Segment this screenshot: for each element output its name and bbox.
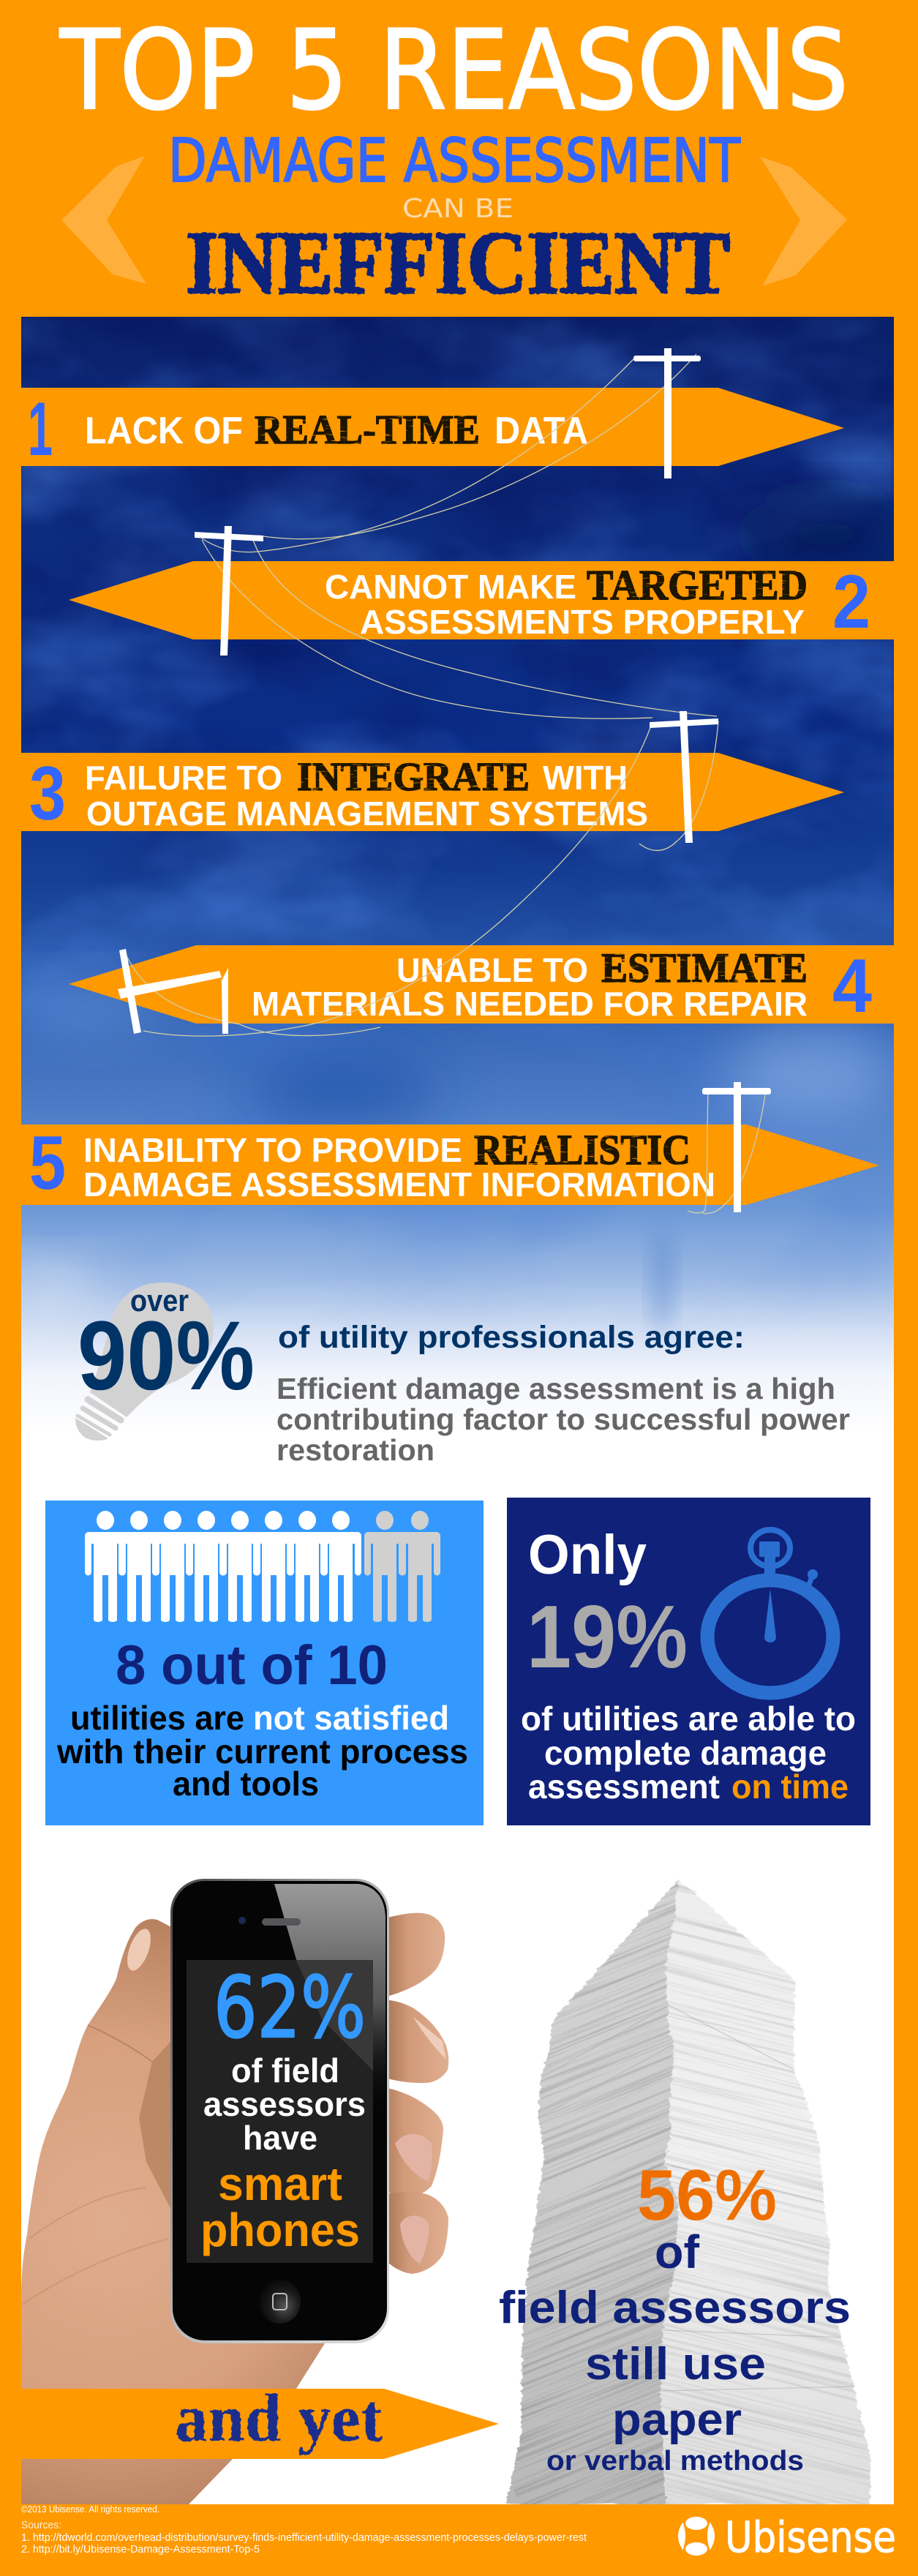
arrow 1: lack of real-time data [21, 387, 844, 472]
arrow 3: failure to integrate [21, 751, 844, 836]
paper text: 56% [637, 2155, 777, 2235]
stat: over 90 percent: over [130, 1283, 189, 1318]
number 2: 2 [832, 560, 870, 645]
arrow 3: failure to integrate: OUTAGE MANAGEMENT SYSTEMS [86, 795, 648, 833]
number 3: 3 [29, 751, 66, 836]
phone text: of field [231, 2051, 339, 2089]
stat: over 90 percent: 90% [78, 1302, 255, 1411]
finger 3 [378, 2087, 443, 2198]
stat: over 90 percent [75, 1283, 850, 1467]
arrow 4: unable to estimate: ESTIMATE [601, 945, 808, 991]
arrow 4: unable to estimate [69, 944, 894, 1029]
illustration: hand holding phone [21, 1879, 448, 2504]
panel: only 19 percent: assessment [528, 1768, 720, 1806]
logo: Ubisense: Ubisense [725, 2512, 896, 2562]
arrow 4: unable to estimate: MATERIALS NEEDED FOR REPAIR [252, 985, 808, 1023]
arrow 2: cannot make targeted assessments properly: CANNOT MAKE [325, 568, 576, 606]
icon: pole 3 [650, 711, 718, 843]
icon: stopwatch [707, 1530, 833, 1693]
sources: Sources: [21, 2519, 61, 2531]
panel: 8 out of 10: with their current process [56, 1732, 468, 1770]
arrow 5: inability to provide: REALISTIC [474, 1126, 691, 1174]
icon: pole 1 [633, 348, 701, 478]
arrow 3: failure to integrate: INTEGRATE [297, 754, 530, 799]
icon: right chevron [760, 157, 847, 286]
icon: pole 5 [702, 1082, 771, 1212]
panel: 8 out of 10: 8 out of 10 [116, 1634, 388, 1697]
phone text: smart [218, 2158, 342, 2210]
finger 4 [384, 2192, 448, 2274]
arrow 2: cannot make targeted assessments properly: TARGETED [587, 561, 808, 609]
panel: only 19 percent: complete damage [544, 1734, 827, 1772]
number 5: 5 [29, 1121, 66, 1206]
footer [0, 2504, 918, 2576]
phone text: 62% [214, 1959, 366, 2057]
stat body text [276, 1372, 850, 1467]
phone text: phones [200, 2204, 360, 2256]
fingernails [123, 1926, 446, 2264]
arrow 3: failure to integrate: WITH [543, 759, 628, 797]
phone text [200, 1959, 366, 2256]
copyright: ©2013 Ubisense. All rights reserved. [21, 2504, 159, 2515]
panel: only 19 percent: 19% [527, 1587, 688, 1686]
panel: 8 out of 10: not satisfied [253, 1699, 449, 1737]
panel: 8 out of 10 [45, 1501, 484, 1825]
palm and thumb [21, 1919, 325, 2504]
paper text: of [655, 2226, 700, 2278]
icon: light bulb [75, 1283, 214, 1441]
phone glare [274, 1884, 385, 2122]
illustration: paper stack [500, 1879, 872, 2504]
arrow 5: inability to provide: DAMAGE ASSESSMENT INFORMATION [83, 1165, 715, 1203]
arrow 2: cannot make targeted assessments properly [69, 560, 894, 645]
arrow 1: lack of real-time data: REAL-TIME [255, 408, 480, 453]
arrow 2: cannot make targeted assessments properly: ASSESSMENTS PROPERLY [360, 603, 805, 641]
subtitle: inefficient: INEFFICIENT [186, 214, 730, 312]
paper text: still use [585, 2339, 766, 2389]
paper text: paper [612, 2395, 742, 2445]
arrow 5: inability to provide [21, 1121, 879, 1206]
icon: left chevron [61, 156, 146, 284]
phone text: assessors [203, 2085, 366, 2123]
panel: only 19 percent: on time [731, 1768, 849, 1806]
subtitle: can be: CAN BE [402, 194, 513, 224]
finger 1 [384, 1913, 445, 1997]
panel: only 19 percent: Only [528, 1524, 647, 1586]
arrow 3: failure to integrate: FAILURE TO [85, 759, 282, 797]
icon: row of people [85, 1511, 440, 1622]
panel: 8 out of 10: utilities are [70, 1699, 244, 1737]
phone home button [260, 2280, 301, 2324]
arrow 4: unable to estimate: UNABLE TO [396, 951, 588, 989]
sources [21, 2519, 587, 2556]
stat body text: Efficient damage assessment is a high [276, 1372, 835, 1405]
panel: stormy sky [0, 317, 907, 1434]
paper text: field assessors [499, 2283, 851, 2333]
phone text: have [243, 2119, 317, 2157]
paper sheet lines [511, 1880, 679, 2504]
hand shading [139, 2041, 171, 2209]
panel: 8 out of 10: and tools [173, 1765, 319, 1803]
stat body text: restoration [276, 1433, 434, 1467]
phone body [170, 1879, 389, 2343]
arrow: and yet [21, 2381, 499, 2459]
phone speaker and camera [262, 1918, 301, 1926]
number 1: 1 [28, 387, 53, 472]
panel: only 19 percent: of utilities are able to [521, 1700, 856, 1738]
finger 2 [384, 1999, 448, 2083]
paper text: or verbal methods [546, 2446, 804, 2477]
arrow 1: lack of real-time data: DATA [494, 410, 588, 452]
header [59, 7, 849, 312]
paper text [499, 2155, 851, 2477]
panel: only 19 percent [507, 1498, 870, 1825]
icon: broken pole 4 [118, 949, 228, 1034]
sources: 1. http://tdworld.com/overhead-distribution/survey-finds-inefficient-utility-damage-assessment-processes-delays-power-rest [21, 2531, 587, 2544]
stat heading: of utility professionals agree: [278, 1320, 745, 1355]
icon: pole 2 [195, 526, 263, 656]
phone screen [187, 1960, 373, 2263]
subtitle: damage assessment: DAMAGE ASSESSMENT [168, 127, 741, 196]
number 4: 4 [832, 944, 872, 1029]
power lines [124, 354, 765, 1214]
arrow 5: inability to provide: INABILITY TO PROVIDE [83, 1131, 462, 1169]
arrow 1: lack of real-time data: LACK OF [85, 410, 243, 452]
stat body text: contributing factor to successful power [276, 1402, 850, 1436]
sources: 2. http://bit.ly/Ubisense-Damage-Assessment-Top-5 [21, 2543, 260, 2556]
arrow: and yet: and yet [175, 2381, 383, 2455]
